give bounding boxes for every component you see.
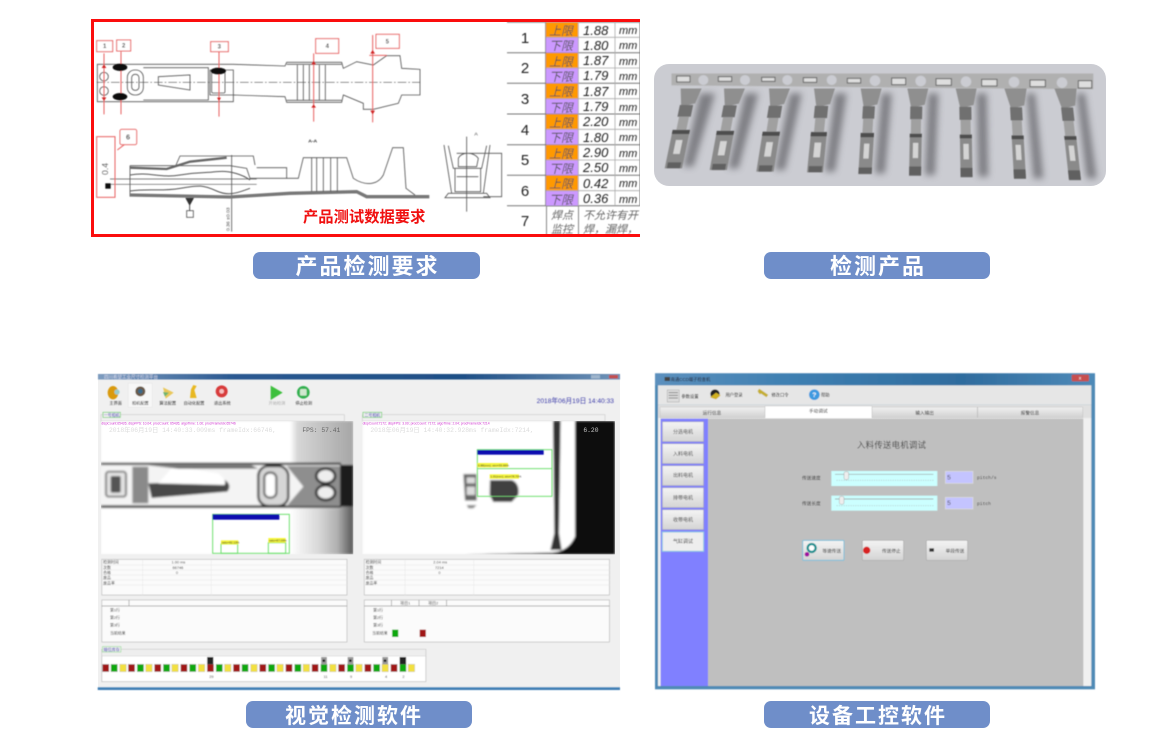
button: stop transfer: [862, 540, 904, 560]
measurement table: 1: [521, 30, 529, 47]
measurement table: 上限: [549, 55, 574, 69]
measurement table: mm: [619, 117, 637, 129]
terminal 8: [1004, 88, 1027, 180]
slider: transfer length: 5: [947, 499, 951, 507]
label: product inspection requirements: 产品检测要求: [295, 254, 440, 279]
measurement table: mm: [619, 194, 637, 206]
slider: transfer speed: pitch/s: [977, 475, 997, 481]
statistics tables and station queue: 9: [350, 674, 352, 679]
tabs: [658, 405, 1091, 418]
panel: equipment control software screenshot: 运行信息: [703, 409, 722, 416]
label: product inspection requirements: [253, 252, 480, 279]
technical drawing of terminal: 3: [218, 45, 222, 51]
detection boxes: [477, 450, 552, 496]
title bar: [655, 373, 1095, 385]
panel: equipment control software screenshot: 排带电机: [673, 494, 693, 501]
measurement table: 1.80: [583, 130, 609, 145]
statistics tables and station queue: 7214: [435, 565, 445, 570]
slider: transfer length: [802, 496, 991, 511]
technical drawing of terminal: 2: [122, 44, 126, 50]
measurement table: 3: [521, 91, 529, 108]
terminal 9: [1054, 88, 1082, 181]
slider: transfer length: 传送长度: [802, 500, 821, 507]
panel: equipment control software screenshot: 帮助: [821, 391, 830, 398]
panel: equipment control software screenshot: 修改口令: [771, 392, 789, 399]
panel: equipment control software screenshot: 手动调试: [809, 408, 828, 415]
red measurement markers: [97, 34, 399, 197]
slider: transfer speed: 传送速度: [802, 474, 821, 481]
statistics tables and station queue: 第2行: [110, 615, 120, 620]
statistics tables and station queue: 4: [385, 674, 388, 679]
terminal 6: [906, 88, 928, 176]
technical drawing of terminal: A-A: [308, 138, 317, 144]
statistics tables and station queue: 次数: [366, 565, 374, 570]
button: constant speed transfer: 等速传送: [822, 547, 841, 554]
date and camera image 2: 二号相机: [364, 411, 380, 417]
detection boxes: 0.88(mm); sim=55.66%: [478, 463, 509, 467]
main grey body: [658, 418, 1091, 686]
measurement table: 0.36: [583, 191, 609, 206]
detection boxes: ratio=87.09%: [269, 538, 287, 542]
statistics tables and station queue: 第1行: [110, 608, 120, 613]
toolbar: 算法配置: [159, 399, 176, 405]
panel: equipment control software screenshot: x: [1079, 376, 1082, 381]
slider: transfer length: pitch: [977, 501, 991, 507]
panel: vision inspection software screenshot: [98, 374, 620, 690]
status squares: [102, 664, 415, 672]
measurement table: [507, 22, 640, 236]
statistics tables and station queue: 11: [323, 674, 328, 679]
red frame: [92, 20, 640, 236]
measurement table: 1.87: [583, 53, 609, 68]
position markers: [207, 657, 406, 664]
statistics tables and station queue: 第3行: [110, 622, 120, 627]
measurement table: 焊点: [551, 209, 575, 222]
panel: photo of terminal strip: [654, 64, 1106, 186]
statistics tables and station queue: 2: [402, 674, 405, 679]
camera image 1: [101, 421, 353, 554]
date and camera image 2: 2018年06月19日 14:40:33: [537, 396, 614, 405]
statistics tables and station queue: 检测时间: [103, 560, 119, 565]
terminal 3: [756, 88, 790, 172]
terminal 5: [856, 88, 882, 174]
date and camera image 2: 6.20: [583, 427, 599, 434]
camera image 1: FPS: 57.41: [302, 427, 341, 434]
panel: product inspection requirements: [91, 19, 640, 237]
measurement table: 2.20: [582, 114, 609, 129]
date and camera image 2: dispCount:7172; dispFPS: 3.00; procCount: 7172; algoTime: 2.04; procFrameIdx:7214: [363, 422, 490, 426]
measurement table: mm: [619, 71, 637, 83]
date and camera image 2: [362, 396, 615, 554]
camera image 1: dispCount:65426; dispFPS: 10.04; procCount: 65426; algoTime: 1.00; procFrameIdx:65746: [101, 422, 236, 426]
toolbar: 主界面: [109, 399, 122, 405]
measurement table: mm: [619, 132, 637, 144]
measurement table: 4: [521, 122, 529, 139]
terminal body: [101, 463, 341, 508]
panel: equipment control software screenshot: 气缸调试: [673, 538, 693, 545]
measurement table: 上限: [549, 24, 574, 38]
label: inspected product: 检测产品: [830, 254, 926, 279]
measurement table: 2.90: [582, 145, 609, 160]
technical drawing of terminal: 5: [386, 39, 390, 45]
slider: transfer speed: [802, 471, 997, 486]
measurement table: 上限: [549, 85, 574, 99]
statistics tables and station queue: 当前结果: [110, 630, 126, 635]
statistics tables and station queue: 废品率: [366, 580, 377, 585]
measurement table: 1.79: [583, 68, 608, 83]
statistics tables and station queue: 1.00 ms: [172, 560, 185, 565]
toolbar: [101, 383, 344, 421]
red caption: 产品测试数据要求: [303, 208, 425, 226]
window title bar: 四川希望工业尺寸检测平台: [104, 374, 158, 380]
measurement table: 2: [521, 60, 529, 77]
carrier strip: [672, 74, 1093, 89]
terminal 4: [806, 88, 835, 172]
measurement table: mm: [619, 25, 637, 37]
statistics tables and station queue: 废品: [103, 575, 111, 580]
measurement table: mm: [619, 102, 637, 114]
statistics tables and station queue: 29: [209, 674, 214, 679]
technical drawing of terminal: 0.4: [100, 163, 110, 175]
measurement table: mm: [619, 148, 637, 160]
panel: equipment control software screenshot: 参数设置: [681, 393, 699, 400]
panel: equipment control software screenshot: 收带电机: [673, 516, 693, 523]
measurement table: 下限: [549, 101, 574, 115]
measurement table: 6: [521, 183, 529, 200]
detection boxes: 1.01(mm); sim=78.70%: [490, 475, 522, 479]
statistics tables and station queue: 项目1: [400, 601, 410, 606]
technical drawing of terminal: 0.36 ±0.03: [225, 207, 231, 231]
measurement table: 1.79: [583, 99, 608, 114]
toolbar: 自动化配置: [184, 399, 204, 405]
measurement table: 下限: [549, 131, 574, 145]
statistics tables and station queue: 第1行: [373, 608, 383, 613]
detection boxes: ratio=82.13%: [222, 541, 240, 545]
statistics tables and station queue: 废品率: [103, 580, 115, 585]
measurement table: 焊，漏焊，: [583, 223, 638, 236]
label: vision inspection software: [246, 701, 472, 728]
measurement table: 5: [521, 152, 529, 169]
panel: equipment control software screenshot: 分选电机: [673, 428, 693, 435]
toolbar: 停止检测: [295, 399, 312, 405]
measurement table: 1.88: [583, 23, 609, 38]
statistics tables and station queue: 检测时间: [366, 560, 381, 565]
terminal 2: [709, 88, 745, 170]
statistics tables and station queue: 第3行: [373, 622, 383, 627]
measurement table: 下限: [549, 193, 574, 207]
technical drawing of terminal: 4: [326, 44, 330, 50]
terminal 1: [664, 88, 702, 168]
measurement table: 1.80: [583, 38, 609, 53]
statistics tables and station queue: 0: [438, 570, 441, 575]
technical drawing of terminal: A: [474, 132, 478, 138]
measurement table: 下限: [549, 162, 574, 176]
button: stop transfer: 传送停止: [882, 547, 901, 554]
button: step transfer: [926, 540, 968, 560]
measurement table: 上限: [549, 116, 574, 130]
toolbar: 一号相机: [104, 411, 120, 417]
technical drawing of terminal: [97, 34, 502, 232]
statistics tables and station queue: 第2行: [373, 615, 383, 620]
measurement table: mm: [619, 178, 637, 190]
date and camera image 2: 2018年06月19日 14:40:32.928ms frameIdx:7214,: [370, 425, 534, 434]
panel: equipment control software screenshot: 入料电机: [673, 450, 693, 457]
button: constant speed transfer: [803, 540, 844, 560]
camera image 1: 2018年06月19日 14:40:33.009ms frameIdx:66746,: [109, 425, 276, 434]
measurement table: 监控: [551, 223, 575, 236]
label: equipment control software: [764, 701, 990, 728]
statistics tables and station queue: [98, 559, 620, 690]
statistics tables and station queue: 熔位库存: [104, 646, 120, 652]
label: equipment control software: 设备工控软件: [809, 705, 947, 728]
statistics tables and station queue: 66746: [173, 565, 183, 570]
statistics tables and station queue: 废品: [366, 575, 374, 580]
statistics tables and station queue: 2.04 ms: [433, 560, 447, 565]
panel: equipment control software screenshot: [655, 373, 1095, 689]
detection boxes: [213, 514, 289, 553]
panel: equipment control software screenshot: 报警信息: [1021, 409, 1040, 416]
section title: 入料传送电机调试: [857, 440, 927, 450]
panel: equipment control software screenshot: 南通CCD端子检查机: [671, 376, 711, 383]
terminal shadows: [683, 93, 1097, 178]
measurement table: 1.87: [583, 84, 609, 99]
measurement table: 2.50: [582, 160, 609, 175]
measurement table: 不允许有开: [583, 209, 640, 222]
statistics tables and station queue: 合格: [103, 570, 111, 575]
measurement table: 0.42: [583, 176, 609, 191]
measurement table: mm: [619, 86, 637, 98]
panel: equipment control software screenshot: ?: [812, 392, 816, 399]
toolbar: 退出系统: [214, 399, 231, 405]
toolbar: 相机配置: [132, 399, 149, 405]
statistics tables and station queue: 0: [176, 570, 178, 575]
measurement table: 下限: [549, 39, 574, 53]
slider: transfer speed: 5: [947, 473, 951, 481]
statistics tables and station queue: 项目2: [428, 601, 438, 606]
measurement table: mm: [619, 56, 637, 68]
measurement table: 上限: [549, 177, 574, 191]
technical drawing of terminal: 1: [103, 44, 107, 50]
statistics tables and station queue: 次数: [103, 565, 111, 570]
panel: equipment control software screenshot: 出料电机: [673, 472, 693, 479]
label: inspected product: [764, 252, 990, 279]
label: vision inspection software: 视觉检测软件: [285, 704, 423, 728]
measurement table: 上限: [549, 147, 574, 161]
left motor menu: [661, 419, 708, 686]
measurement table: mm: [619, 40, 637, 52]
measurement table: 7: [521, 213, 529, 230]
window title bar: [98, 374, 620, 380]
button: step transfer: 单段传送: [946, 547, 965, 554]
panel: equipment control software screenshot: 用户登录: [725, 392, 743, 399]
terminal 7: [956, 88, 978, 177]
measurement table: 下限: [549, 70, 574, 84]
panel: equipment control software screenshot: 输入输出: [915, 409, 934, 416]
toolbar: 开始检测: [269, 399, 285, 405]
statistics tables and station queue: 当前结果: [372, 630, 388, 635]
measurement table: mm: [619, 163, 637, 175]
technical drawing of terminal: 6: [126, 133, 130, 142]
statistics tables and station queue: 合格: [366, 570, 374, 575]
toolbar: [658, 385, 1091, 405]
